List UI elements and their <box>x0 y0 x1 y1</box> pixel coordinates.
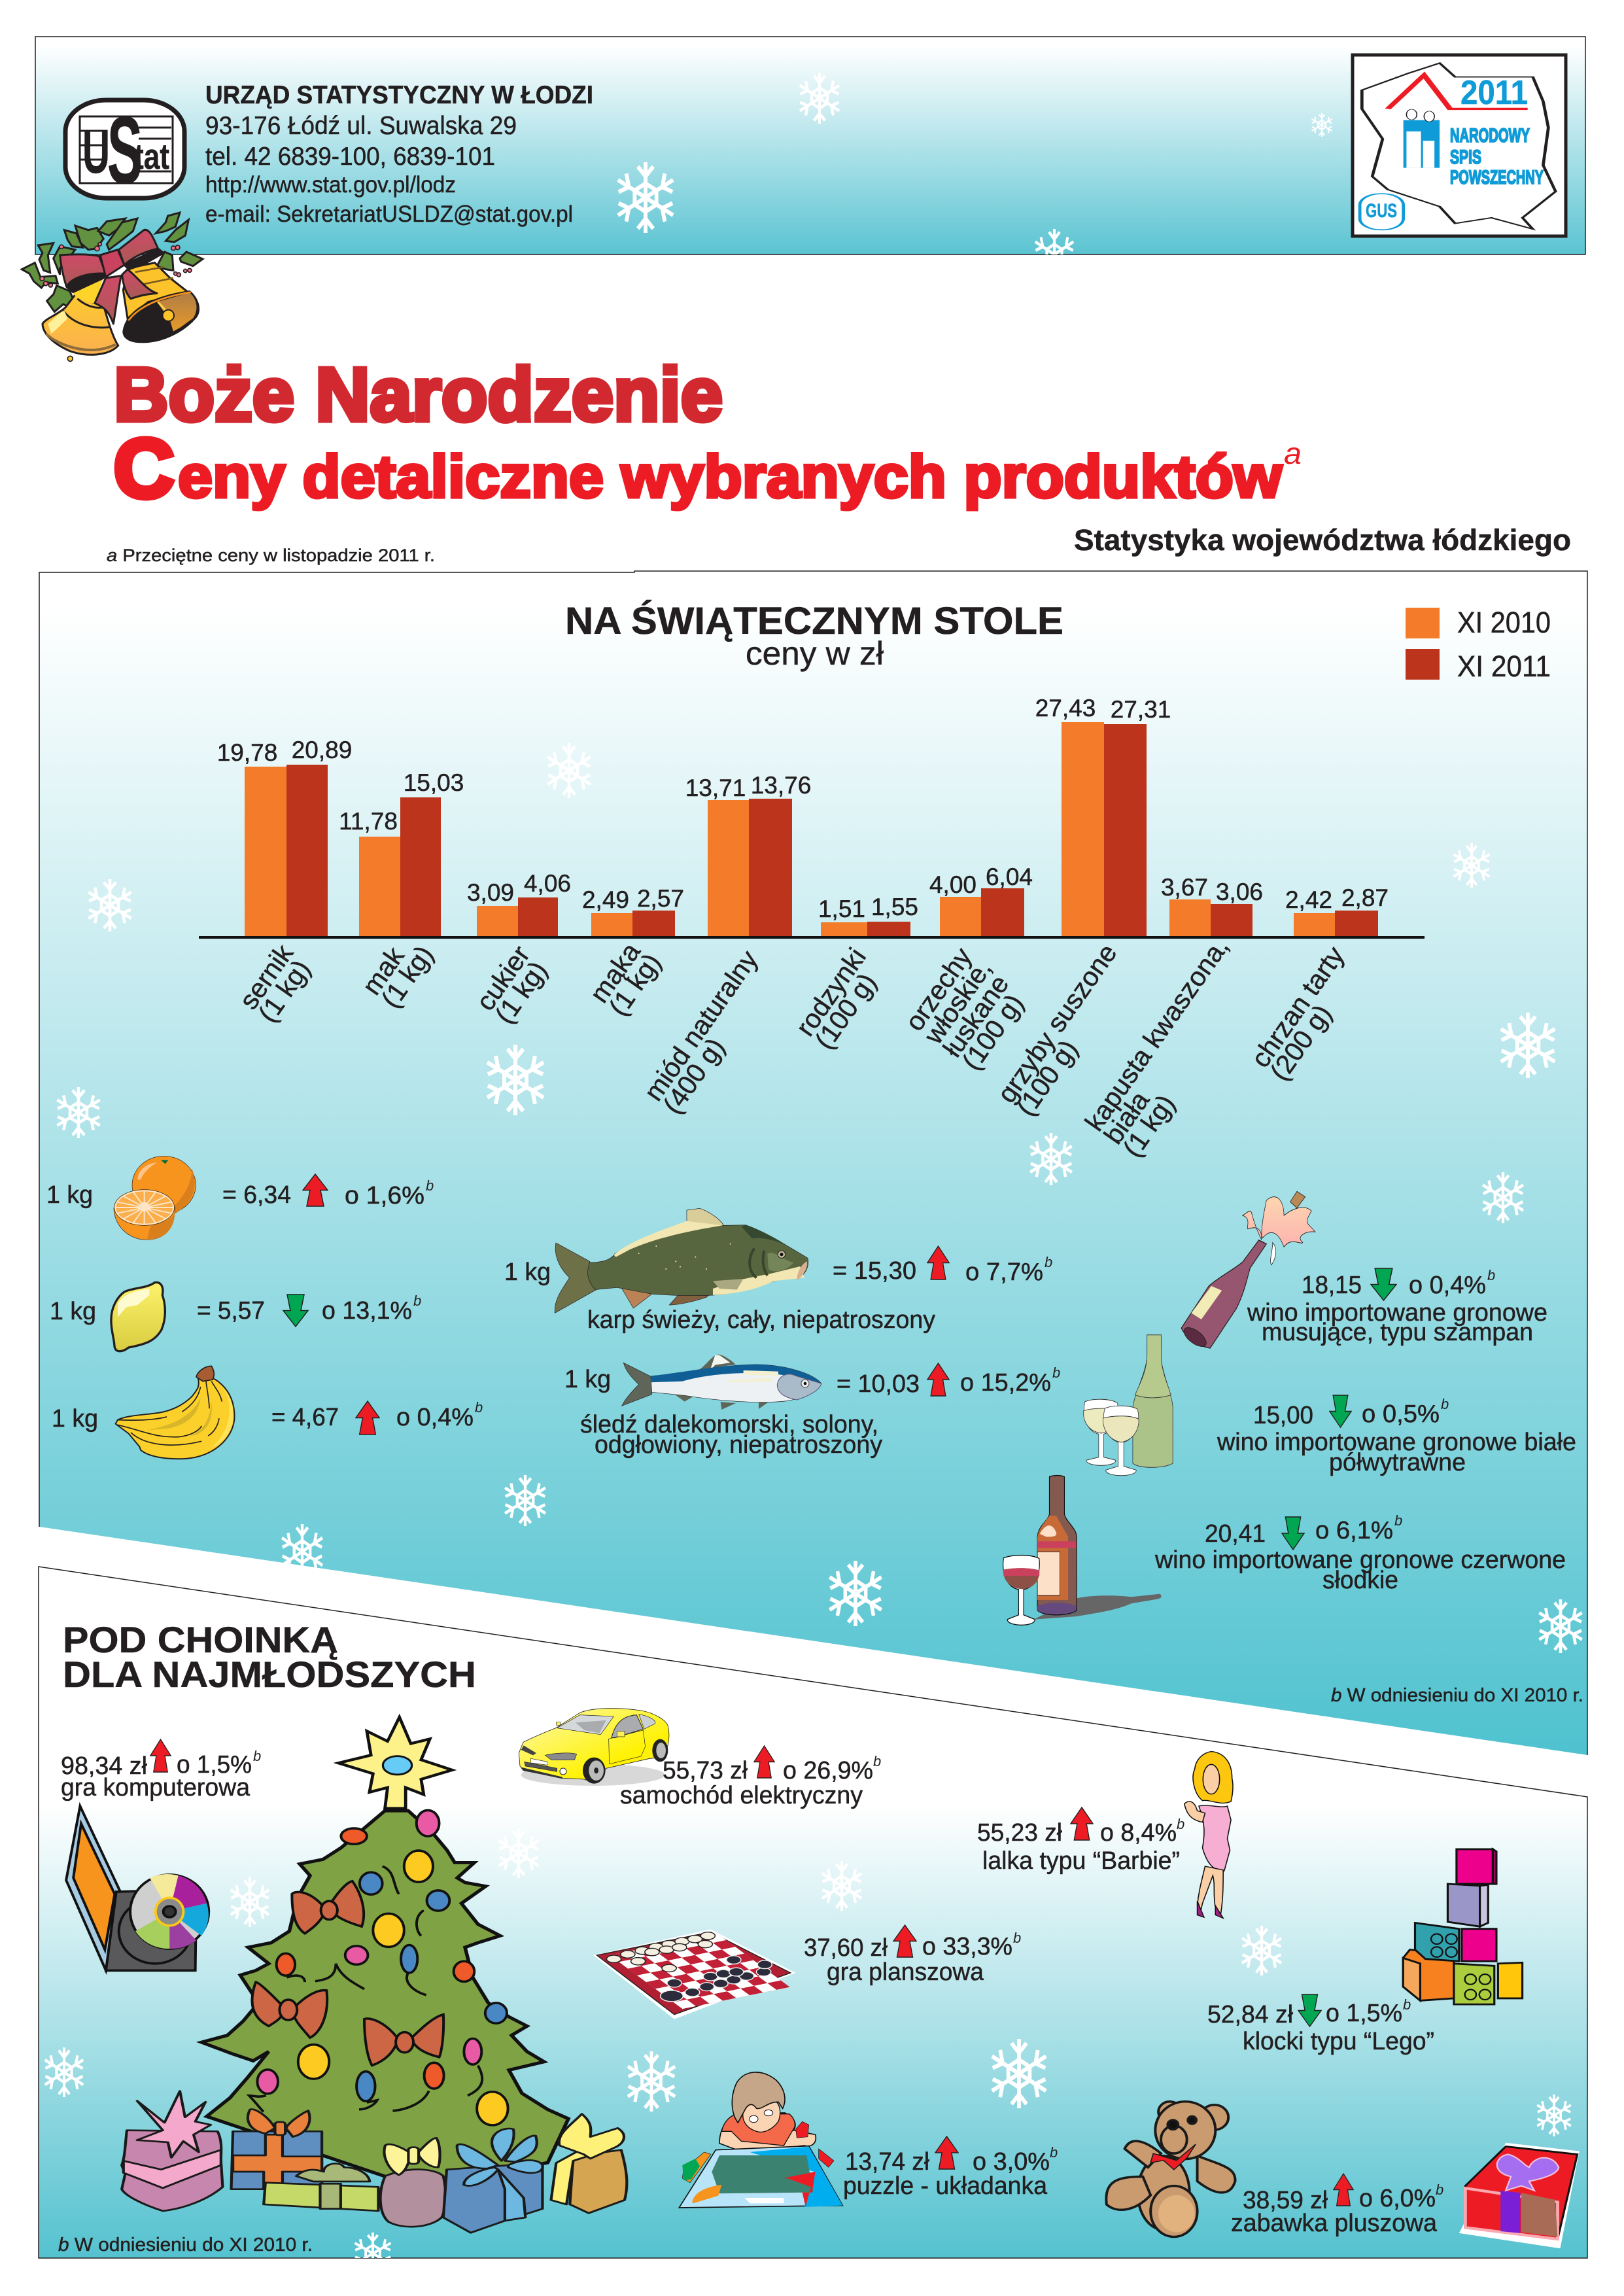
tree bows <box>252 1881 443 2066</box>
text: zabawka pluszowa: o 6,0% <box>1359 2185 1436 2212</box>
text: puzzle: o 3,0% <box>973 2148 1050 2176</box>
text: gra komputerowa: gra komputerowa <box>61 1774 251 1801</box>
heading: pod choinką: DLA NAJMŁODSZYCH <box>63 1654 476 1695</box>
item: red wine: 20,41 <box>1205 1520 1266 1548</box>
category labels <box>233 932 1351 1162</box>
icon: board game <box>593 1929 796 2019</box>
category labels: włoskie, <box>918 954 997 1050</box>
text: samochód elektryczny: 55,73 zł <box>663 1757 748 1784</box>
text: gra komputerowa: o 1,5% <box>177 1751 252 1779</box>
text: gra planszowa: o 33,3% <box>922 1933 1012 1960</box>
right bell <box>123 263 188 319</box>
icon: teddy bear <box>1106 2102 1235 2237</box>
item: white wine: półwytrawne <box>1329 1449 1466 1476</box>
bar value labels: 6,04 <box>986 863 1033 890</box>
category labels: (1 kg) <box>1117 1089 1181 1162</box>
heading: pod choinką: POD CHOINKĄ <box>63 1619 338 1660</box>
bar value labels: 1,55 <box>871 894 918 920</box>
panel: header <box>35 37 1585 280</box>
arrow down <box>1282 1517 1304 1550</box>
category labels: (1 kg) <box>375 940 439 1013</box>
text: lalka Barbie: b <box>1177 1816 1184 1832</box>
item: red wine: o 6,1% <box>1315 1517 1393 1544</box>
item: bananas <box>52 1366 483 1459</box>
text: samochód elektryczny <box>620 1746 881 1809</box>
header address text <box>205 81 593 227</box>
category labels: grzyby suszone <box>992 938 1123 1108</box>
arrow up <box>927 1363 949 1396</box>
chart subheading: ceny w zł <box>746 635 884 672</box>
item: lemons: b <box>413 1293 421 1309</box>
icon: gift box <box>1459 2143 1580 2248</box>
header snowflakes <box>618 73 1332 280</box>
text: gra komputerowa <box>61 1739 261 1801</box>
category labels: (100 g) <box>1011 1034 1084 1121</box>
icon: gift presents <box>122 2091 627 2233</box>
item: carp: o 7,7% <box>965 1259 1043 1286</box>
item: sparkling wine: o 0,4% <box>1409 1272 1486 1299</box>
text: zabawka pluszowa <box>1231 2174 1443 2237</box>
bar value labels: 13,71 <box>685 774 746 801</box>
text: gra planszowa <box>804 1925 1021 1986</box>
text: gra komputerowa: 98,34 zł <box>61 1752 148 1780</box>
illustrations right half <box>1106 1752 1580 2248</box>
text: klocki Lego: o 1,5% <box>1326 2000 1402 2027</box>
item: herring: o 15,2% <box>960 1369 1051 1397</box>
category labels: biała <box>1098 1086 1155 1149</box>
bar value labels: 2,87 <box>1341 884 1389 911</box>
bar chart <box>199 695 1425 1162</box>
arrow up <box>150 1739 171 1772</box>
icon: carp <box>555 1208 808 1313</box>
item: red wine <box>1003 1476 1566 1625</box>
bar value labels: 2,57 <box>637 885 684 912</box>
item: oranges: b <box>426 1177 434 1194</box>
item: lemons: 1 kg <box>50 1298 96 1325</box>
bow <box>60 230 164 324</box>
icon: christmas tree <box>201 1717 568 2186</box>
item: white wine: 15,00 <box>1253 1402 1313 1429</box>
item: herring: odgłowiony, niepatroszony <box>595 1431 882 1459</box>
bar value labels: 2,42 <box>1285 886 1332 913</box>
blue gift with orange ribbon <box>232 2110 322 2189</box>
item: carp <box>504 1208 1052 1334</box>
category labels: chrzan tarty <box>1245 941 1351 1073</box>
item: red wine: wino importowane gronowe czerwone <box>1154 1546 1566 1574</box>
item: bananas: 1 kg <box>52 1405 98 1433</box>
item: oranges: 1 kg <box>46 1181 93 1209</box>
arrow down <box>1371 1268 1396 1300</box>
text: klocki Lego: b <box>1403 1996 1411 2013</box>
arrow up <box>893 1925 916 1957</box>
berries <box>40 243 192 287</box>
logo: Narodowy Spis Powszechny 2011: GUS <box>1366 200 1397 222</box>
panel 2 snowflakes <box>57 743 1582 1653</box>
icon: christmas bells <box>22 213 203 361</box>
left bell <box>43 293 118 355</box>
green roll gift <box>264 2164 378 2211</box>
logo: UStat: tat <box>134 136 169 177</box>
blue gift with blue bow <box>443 2129 543 2233</box>
logo: Narodowy Spis Powszechny 2011: NARODOWY <box>1450 125 1530 147</box>
logo: UStat <box>65 97 184 203</box>
category labels: mąka <box>584 937 646 1008</box>
legend <box>1406 606 1551 683</box>
arrow up <box>303 1174 328 1206</box>
item: sparkling wine <box>1181 1191 1547 1350</box>
arrow up <box>754 1746 774 1778</box>
bar value labels: 13,76 <box>751 772 811 799</box>
tan gift with yellow bow <box>551 2114 627 2213</box>
item: herring: b <box>1052 1365 1060 1381</box>
text: gra planszowa: gra planszowa <box>827 1958 984 1986</box>
category labels: (1 kg) <box>252 954 316 1028</box>
text: gra planszowa: b <box>1013 1930 1021 1946</box>
bar value labels: 4,06 <box>524 870 571 897</box>
item: lemons: = 5,57 <box>197 1297 265 1325</box>
text: puzzle <box>843 2136 1058 2200</box>
text: zabawka pluszowa: zabawka pluszowa <box>1231 2210 1438 2237</box>
item: red wine: b <box>1394 1512 1402 1529</box>
item: lemons <box>50 1282 421 1351</box>
logo: Narodowy Spis Powszechny 2011 <box>1353 55 1566 236</box>
item: herring: 1 kg <box>564 1366 611 1393</box>
item: bananas: o 0,4% <box>396 1404 474 1431</box>
icon: game cd <box>66 1806 209 1970</box>
text: samochód elektryczny: samochód elektryczny <box>620 1782 863 1809</box>
illustrations with zoom coordinates: left half <box>66 1717 796 2186</box>
mauve bag gift <box>381 2138 445 2227</box>
icon: toy blocks <box>1403 1849 1523 2004</box>
panel: na świątecznym stole <box>39 571 1587 1755</box>
bar value labels: 11,78 <box>339 808 398 835</box>
category labels: miód naturalny <box>638 945 764 1106</box>
title: Ceny detaliczne wybranych produktów: a <box>1284 436 1302 470</box>
icon: herring <box>622 1355 821 1410</box>
bar value labels: 3,06 <box>1216 878 1263 905</box>
item: herring: = 10,03 <box>837 1370 920 1398</box>
item: sparkling wine: wino importowane gronowe <box>1247 1299 1547 1327</box>
text: lalka Barbie: lalka typu “Barbie” <box>982 1847 1180 1875</box>
item: carp: = 15,30 <box>833 1257 916 1285</box>
item: oranges: o 1,6% <box>345 1182 424 1209</box>
item: white wine: o 0,5% <box>1362 1400 1440 1428</box>
logo: Narodowy Spis Powszechny 2011: SPIS <box>1450 147 1481 168</box>
item: oranges: = 6,34 <box>222 1181 291 1209</box>
bar value labels <box>217 695 1389 922</box>
arrow up <box>356 1401 379 1435</box>
item: white wine: wino importowane gronowe białe <box>1217 1429 1576 1456</box>
text: klocki Lego: klocki typu “Lego” <box>1243 2028 1434 2055</box>
footnote b panel 3: b W odniesieniu do XI 2010 r. <box>58 2235 313 2255</box>
light wires <box>249 1866 482 2112</box>
category labels: kapusta kwaszona, <box>1079 932 1234 1136</box>
logo: Narodowy Spis Powszechny 2011: 2011 <box>1460 74 1528 112</box>
logo: Narodowy Spis Powszechny 2011: POWSZECHNY <box>1450 167 1544 188</box>
category labels: (200 g) <box>1264 999 1338 1086</box>
text: samochód elektryczny: b <box>873 1753 881 1769</box>
icon: puzzle child <box>679 2072 842 2208</box>
header address text: http://www.stat.gov.pl/lodz <box>205 172 456 198</box>
text: lalka Barbie: o 8,4% <box>1100 1819 1177 1847</box>
arrow down <box>283 1295 308 1327</box>
text: puzzle: b <box>1050 2144 1058 2161</box>
item: sparkling wine: b <box>1487 1267 1495 1283</box>
category labels: orzechy <box>899 942 978 1036</box>
title: Ceny detaliczne wybranych produktów <box>114 422 1302 515</box>
heading: pod choinką <box>63 1619 476 1695</box>
item: red wine: słodkie <box>1322 1567 1398 1594</box>
arrow up <box>1334 2174 1353 2206</box>
bar value labels: 2,49 <box>582 886 629 913</box>
header address text: URZĄD STATYSTYCZNY W ŁODZI <box>205 81 593 109</box>
bar value labels: 27,31 <box>1111 696 1171 723</box>
logo: UStat: U <box>82 117 110 186</box>
text: klocki Lego: 52,84 zł <box>1207 2001 1294 2028</box>
category labels: (100 g) <box>809 967 882 1054</box>
text: puzzle: 13,74 zł <box>845 2148 930 2176</box>
bar value labels: 27,43 <box>1035 695 1096 722</box>
icon: barbie doll <box>1184 1752 1233 1918</box>
text: zabawka pluszowa: b <box>1436 2182 1443 2198</box>
footnote a: a Przeciętne ceny w listopadzie 2011 r. <box>107 546 435 565</box>
subtitle: Statystyka województwa łódzkiego: Statystyka województwa łódzkiego <box>1074 523 1571 557</box>
panel: pod choinką <box>39 1567 1587 2274</box>
item: lemons: o 13,1% <box>322 1297 412 1325</box>
item: oranges <box>46 1156 434 1240</box>
arrow up <box>927 1246 949 1279</box>
text: lalka Barbie <box>977 1807 1184 1875</box>
logo: UStat: S <box>107 97 143 203</box>
category labels: (400 g) <box>657 1032 731 1119</box>
arrow down <box>1298 1994 1321 2026</box>
item: white wine <box>1084 1335 1576 1476</box>
tree star <box>338 1717 452 1809</box>
item: carp: 1 kg <box>504 1259 551 1286</box>
category labels: łuskane <box>937 969 1014 1062</box>
text: klocki Lego <box>1207 1994 1434 2055</box>
arrow up <box>1071 1807 1093 1840</box>
pink gift <box>122 2091 222 2211</box>
bar value labels: 3,67 <box>1161 874 1208 901</box>
item: bananas: b <box>475 1399 483 1416</box>
icon: orange <box>114 1156 196 1240</box>
icon: car <box>519 1709 669 1786</box>
category labels: (1 kg) <box>489 956 553 1029</box>
text: lalka Barbie: 55,23 zł <box>977 1819 1063 1847</box>
category labels: cukier <box>470 940 536 1016</box>
bar value labels: 4,00 <box>929 871 976 898</box>
icon: red bottle and glass <box>1003 1476 1162 1625</box>
category labels: (100 g) <box>956 988 1029 1075</box>
category labels: rodzynki <box>790 943 872 1041</box>
header address text: e-mail: SekretariatUSLDZ@stat.gov.pl <box>205 201 573 227</box>
bar value labels: 20,89 <box>292 737 352 763</box>
chart heading: NA ŚWIĄTECZNYM STOLE <box>565 600 1063 642</box>
title: Ceny detaliczne wybranych produktów: eny detaliczne wybranych produktów <box>178 444 1282 510</box>
title: Ceny detaliczne wybranych produktów: C <box>114 422 174 515</box>
header address text: 93-176 Łódź ul. Suwalska 29 <box>205 112 517 140</box>
item: sparkling wine: 18,15 <box>1302 1272 1362 1299</box>
text: gra komputerowa: b <box>253 1748 261 1764</box>
item: herring <box>564 1355 1060 1459</box>
icon: white bottle and glasses <box>1084 1335 1173 1476</box>
holly leaves <box>22 213 203 312</box>
arrow down <box>1330 1395 1351 1427</box>
tree ornaments <box>257 1810 508 2125</box>
icon: bananas <box>116 1366 234 1459</box>
panel 3 snowflakes <box>45 1828 1571 2274</box>
item: carp: karp świeży, cały, niepatroszony <box>587 1306 935 1334</box>
legend: XI 2010 <box>1457 606 1551 639</box>
text: puzzle: puzzle - układanka <box>843 2172 1048 2200</box>
item: sparkling wine: musujące, typu szampan <box>1262 1319 1533 1346</box>
footnote b panel 2: b W odniesieniu do XI 2010 r. <box>1331 1685 1583 1706</box>
text: samochód elektryczny: o 26,9% <box>783 1757 873 1784</box>
bar value labels: 15,03 <box>404 769 464 796</box>
bar value labels: 19,78 <box>217 739 277 766</box>
category labels: sernik <box>233 939 299 1015</box>
legend: XI 2011 <box>1457 650 1551 683</box>
item: herring: śledź dalekomorski, solony, <box>580 1411 878 1438</box>
text: gra planszowa: 37,60 zł <box>804 1934 888 1962</box>
category labels: mak <box>356 941 410 1000</box>
arrow up <box>935 2136 958 2169</box>
category labels: (1 kg) <box>603 948 666 1021</box>
header address text: tel. 42 6839-100, 6839-101 <box>205 143 495 171</box>
bar value labels: 1,51 <box>818 896 865 922</box>
item: bananas: = 4,67 <box>271 1404 339 1431</box>
text: zabawka pluszowa: 38,59 zł <box>1243 2187 1328 2214</box>
icon: lemon <box>111 1282 165 1351</box>
title: Boże Narodzenie: Boże Narodzenie <box>114 352 723 437</box>
item: white wine: b <box>1441 1396 1449 1412</box>
item: carp: b <box>1045 1254 1052 1270</box>
icon: sparkling bottle <box>1181 1191 1315 1350</box>
bar value labels: 3,09 <box>467 879 514 906</box>
